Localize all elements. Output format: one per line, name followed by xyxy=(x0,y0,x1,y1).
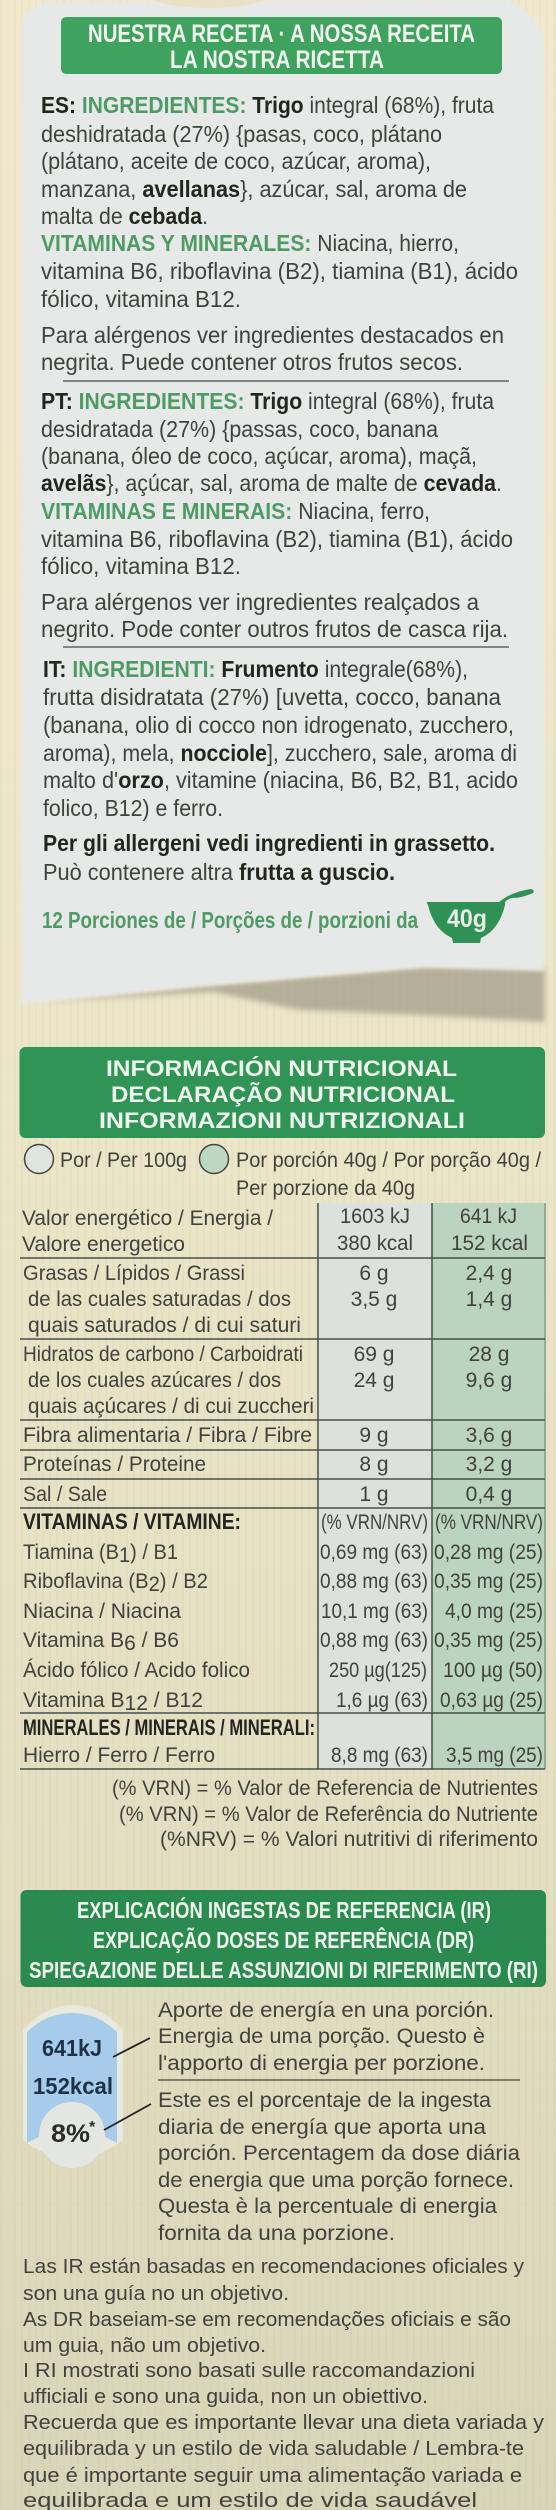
row: fats: 1,4 g xyxy=(466,1288,512,1311)
row: energy: 1603 kJ xyxy=(340,1205,410,1228)
text block: energy explanation: Energia de uma porção. Questo è xyxy=(158,2024,485,2048)
text block: Italian ingredients: Per gli allergeni vedi ingredienti in grassetto. xyxy=(43,830,495,856)
row: energy: 152 kcal xyxy=(451,1232,528,1255)
row: iron: 3,5 mg (25) xyxy=(446,1744,543,1767)
icon: energy label badge: * xyxy=(89,2119,96,2136)
text block: Italian ingredients: malto d'orzo, vitamine (niacina, B6, B2, B1, acido xyxy=(43,767,518,793)
row: fats: quais saturados / di cui saturi xyxy=(28,1314,301,1337)
legend: per 100g: Por / Per 100g xyxy=(60,1149,187,1172)
text block: Portuguese ingredients: PT: INGREDIENTES: Trigo integral (68%), fruta xyxy=(41,388,494,414)
text block: Spanish ingredients: vitamina B6, riboflavina (B2), tiamina (B1), ácido xyxy=(41,258,518,284)
text block: Portuguese ingredients: avelãs}, açúcar, sal, aroma de malte de cevada. xyxy=(41,470,502,496)
row: carbohydrates xyxy=(23,1343,512,1418)
row: vitamin B6: 6 xyxy=(124,1632,136,1655)
legend: per portion xyxy=(200,1144,541,1200)
footnotes: reference values: (% VRN) = % Valor de Referencia de Nutrientes xyxy=(112,1777,538,1800)
row: riboflavin: 0,88 mg (63) xyxy=(320,1570,428,1593)
row: fats xyxy=(23,1262,512,1337)
row: protein: 8 g xyxy=(359,1453,389,1476)
text block: Spanish ingredients: VITAMINAS Y MINERALES: Niacina, hierro, xyxy=(41,230,459,256)
row: folic acid: 250 µg(125) xyxy=(329,1659,427,1682)
row: vitamin B6 xyxy=(23,1629,543,1655)
row: fats: 3,5 g xyxy=(351,1288,397,1311)
row: carbohydrates: Hidratos de carbono / Carboidrati xyxy=(23,1343,303,1366)
row: iron: Hierro / Ferro / Ferro xyxy=(23,1744,215,1767)
legend: per 100g xyxy=(24,1144,187,1174)
row: fibre xyxy=(23,1424,512,1447)
row: folic acid: Ácido fólico / Acido folico xyxy=(23,1659,250,1682)
row: fats: 2,4 g xyxy=(466,1262,512,1285)
row: niacin: 10,1 mg (63) xyxy=(321,1600,428,1623)
row: folic acid: 100 µg (50) xyxy=(443,1659,543,1682)
row: fats: 6 g xyxy=(359,1262,389,1285)
row: iron: 8,8 mg (63) xyxy=(331,1744,428,1767)
text block: Portuguese ingredients: negrito. Pode conter outros frutos de casca rija. xyxy=(41,616,508,642)
text block: Portuguese ingredients: Para alérgenos ver ingredientes realçados a xyxy=(41,589,479,615)
text block: percentage explanation xyxy=(158,2088,520,2245)
row: riboflavin xyxy=(23,1570,543,1596)
row: fibre: 3,6 g xyxy=(466,1424,512,1447)
text block: Spanish ingredients: Para alérgenos ver ingredientes destacados en xyxy=(41,322,504,348)
row: vitamins heading: (% VRN/NRV) xyxy=(321,1511,428,1534)
footnotes: reference values xyxy=(112,1777,538,1851)
text block: Italian ingredients: aroma), mela, nocciole], zucchero, sale, aroma di xyxy=(43,740,517,766)
nutrition table xyxy=(20,1203,545,1769)
text block: Italian ingredients: IT: INGREDIENTI: Frumento integrale(68%), xyxy=(43,656,468,682)
text block: Spanish ingredients: deshidratada (27%) {pasas, coco, plátano xyxy=(41,121,442,147)
row: fibre: 9 g xyxy=(359,1424,389,1447)
footnotes: reference values: (%NRV) = % Valori nutritivi di riferimento xyxy=(160,1828,538,1851)
row: niacin: 4,0 mg (25) xyxy=(445,1600,543,1623)
text block: Italian ingredients: Può contenere altra frutta a guscio. xyxy=(43,859,395,885)
legend: per portion: Per porzione da 40g xyxy=(236,1177,415,1200)
row: folic acid xyxy=(23,1659,543,1682)
row: iron xyxy=(23,1744,543,1767)
row: thiamine: 1 xyxy=(119,1544,130,1567)
row: energy: Valore energetico xyxy=(22,1233,185,1256)
row: carbohydrates: 28 g xyxy=(469,1343,509,1366)
row: carbohydrates: de los cuales azúcares / dos xyxy=(28,1369,281,1392)
heading: nutrition information xyxy=(20,1047,545,1138)
heading: nutrition information: INFORMACIÓN NUTRICIONAL xyxy=(106,1056,457,1081)
text block: Portuguese ingredients: desidratada (27%) {passas, coco, banana xyxy=(41,416,438,442)
row: minerals heading: MINERALES / MINERAIS / MINERALI: xyxy=(23,1715,315,1740)
text block: reference intake notes: Las IR están basadas en recomendaciones oficiales y xyxy=(23,2255,525,2278)
text block: Spanish ingredients: negrita. Puede contener otros frutos secos. xyxy=(41,349,463,375)
panel shadow xyxy=(40,967,545,1022)
text block: Portuguese ingredients: VITAMINAS E MINERAIS: Niacina, ferro, xyxy=(41,498,430,524)
row: thiamine: Tiamina (B xyxy=(23,1541,124,1564)
text block: percentage explanation: Questa è la percentuale di energia xyxy=(158,2194,497,2218)
row: vitamin B12: / B12 xyxy=(148,1689,203,1712)
icon: bowl 40g xyxy=(427,889,534,943)
text block: reference intake notes: Recuerda que es importante llevar una dieta variada y xyxy=(23,2411,545,2434)
text block: Italian ingredients xyxy=(43,656,518,885)
row: riboflavin: 0,35 mg (25) xyxy=(434,1570,543,1593)
row: salt xyxy=(23,1483,512,1506)
text block: Spanish ingredients: (plátano, aceite de coco, azúcar, aroma), xyxy=(41,148,431,174)
heading: reference intakes xyxy=(20,1890,546,1987)
text block: Spanish ingredients: manzana, avellanas}, azúcar, sal, aroma de xyxy=(41,176,467,202)
text block: percentage explanation: diaria de energía que aporta una xyxy=(158,2115,486,2139)
text block: Spanish ingredients: fólico, vitamina B12. xyxy=(41,286,241,312)
arrow: percentage leader xyxy=(104,2104,151,2130)
text block: reference intake notes xyxy=(23,2255,545,2510)
row: fats: Grasas / Lípidos / Grassi xyxy=(23,1262,245,1285)
row: protein xyxy=(23,1453,512,1476)
row: vitamin B12: 12 xyxy=(125,1692,148,1715)
text block: percentage explanation: porción. Percentagem da dose diária xyxy=(158,2141,520,2165)
text block: reference intake notes: que é importante seguir uma alimentação variada e xyxy=(23,2464,522,2487)
row: vitamin B6: 0,35 mg (25) xyxy=(434,1629,543,1652)
row: vitamin B6: Vitamina B xyxy=(23,1629,124,1652)
row: vitamin B12: 1,6 µg (63) xyxy=(336,1689,428,1712)
row: thiamine xyxy=(23,1541,543,1567)
icon: energy label badge: 8% xyxy=(51,2120,90,2148)
row: protein: 3,2 g xyxy=(466,1453,512,1476)
text block: Spanish ingredients: malta de cebada. xyxy=(41,203,208,229)
row: thiamine: 0,28 mg (25) xyxy=(434,1541,543,1564)
row: riboflavin: Riboflavina (B xyxy=(23,1570,154,1593)
row: energy: Valor energético / Energia / xyxy=(22,1207,273,1230)
text block: Spanish ingredients: ES: INGREDIENTES: Trigo integral (68%), fruta xyxy=(41,92,494,118)
row: salt: Sal / Sale xyxy=(23,1483,107,1506)
text block: Italian ingredients: (banana, olio di cocco non idrogenato, zucchero, xyxy=(43,712,514,738)
row: energy: 641 kJ xyxy=(460,1205,517,1228)
footnotes: reference values: (% VRN) = % Valor de Referência do Nutriente xyxy=(119,1803,538,1826)
row: salt: 1 g xyxy=(359,1483,389,1506)
heading: nutrition information: INFORMAZIONI NUTRIZIONALI xyxy=(99,1108,465,1133)
icon: bowl 40g: 40g xyxy=(447,905,487,933)
row: energy xyxy=(22,1205,528,1256)
panel: recipe ingredients xyxy=(21,0,544,1003)
portions text: 12 Porciones de / Porções de / porzioni da xyxy=(42,907,418,933)
row: fats: de las cuales saturadas / dos xyxy=(28,1288,291,1311)
text block: energy explanation: l'apporto di energia per porzione. xyxy=(158,2051,485,2075)
row: vitamin B12: Vitamina B xyxy=(23,1689,124,1712)
row: vitamin B12 xyxy=(23,1689,543,1715)
row: thiamine: 0,69 mg (63) xyxy=(320,1541,428,1564)
text block: energy explanation: Aporte de energía en una porción. xyxy=(158,1998,494,2022)
text block: reference intake notes: son una guía no un objetivo. xyxy=(23,2282,289,2305)
row: riboflavin: ) / B2 xyxy=(160,1570,208,1593)
text block: reference intake notes: As DR baseiam-se em recomendações oficiais e são xyxy=(23,2308,511,2331)
row: vitamin B6: 0,88 mg (63) xyxy=(320,1629,428,1652)
row: vitamins heading xyxy=(23,1509,543,1534)
arrow: energy leader xyxy=(113,2038,150,2057)
text block: reference intake notes: ufficiali e sono una guida, non un obiettivo. xyxy=(23,2385,428,2408)
row: vitamin B6: / B6 xyxy=(136,1629,179,1652)
row: fibre: Fibra alimentaria / Fibra / Fibre xyxy=(23,1424,312,1447)
row: vitamins heading: VITAMINAS / VITAMINE: xyxy=(23,1509,241,1534)
row: vitamin B12: 0,63 µg (25) xyxy=(440,1689,543,1712)
icon: energy label badge xyxy=(23,2005,123,2168)
text block: percentage explanation: de energia que uma porção fornece. xyxy=(158,2168,514,2192)
text block: energy explanation xyxy=(158,1998,494,2075)
text block: Spanish ingredients xyxy=(41,92,518,375)
heading: nutrition information: DECLARAÇÃO NUTRICIONAL xyxy=(111,1082,455,1107)
row: riboflavin: 2 xyxy=(149,1573,160,1596)
heading: nuestra receta: NUESTRA RECETA · A NOSSA RECEITA xyxy=(88,20,475,48)
legend: per portion: Por porción 40g / Por porção 40g / xyxy=(236,1149,541,1172)
heading: nuestra receta xyxy=(61,17,502,74)
row: thiamine: ) / B1 xyxy=(130,1541,178,1564)
text block: reference intake notes: equilibrada y un estilo de vida saludable / Lembra-te xyxy=(23,2437,524,2460)
text block: reference intake notes: um guia, não um objetivo. xyxy=(23,2334,266,2357)
row: niacin: Niacina / Niacina xyxy=(23,1600,181,1623)
text block: Italian ingredients: folico, B12) e ferro. xyxy=(43,795,223,821)
text block: Portuguese ingredients: fólico, vitamina B12. xyxy=(41,553,241,579)
row: carbohydrates: 9,6 g xyxy=(466,1369,512,1392)
row: carbohydrates: quais açúcares / di cui zuccheri xyxy=(28,1395,314,1418)
row: carbohydrates: 24 g xyxy=(354,1369,394,1392)
icon: energy label badge: 641kJ xyxy=(42,2035,102,2061)
row: salt: 0,4 g xyxy=(466,1483,512,1506)
text block: reference intake notes: I RI mostrati sono basati sulle raccomandazioni xyxy=(23,2359,475,2382)
text block: Italian ingredients: frutta disidratata (27%) [uvetta, cocco, banana xyxy=(43,684,501,710)
row: energy: 380 kcal xyxy=(337,1232,413,1255)
row: niacin xyxy=(23,1600,543,1623)
text block: Portuguese ingredients: (banana, óleo de coco, açúcar, aroma), maçã, xyxy=(41,443,477,469)
heading: nuestra receta: LA NOSTRA RICETTA xyxy=(170,46,384,74)
text block: Portuguese ingredients: vitamina B6, riboflavina (B2), tiamina (B1), ácido xyxy=(41,526,513,552)
text block: Portuguese ingredients xyxy=(41,388,513,642)
row: carbohydrates: 69 g xyxy=(354,1343,394,1366)
row: protein: Proteínas / Proteine xyxy=(23,1453,206,1476)
icon: energy label badge: 152kcal xyxy=(33,2073,113,2099)
text block: percentage explanation: Este es el porcentaje de la ingesta xyxy=(158,2088,491,2112)
text block: percentage explanation: fornita da una porzione. xyxy=(158,2221,395,2245)
